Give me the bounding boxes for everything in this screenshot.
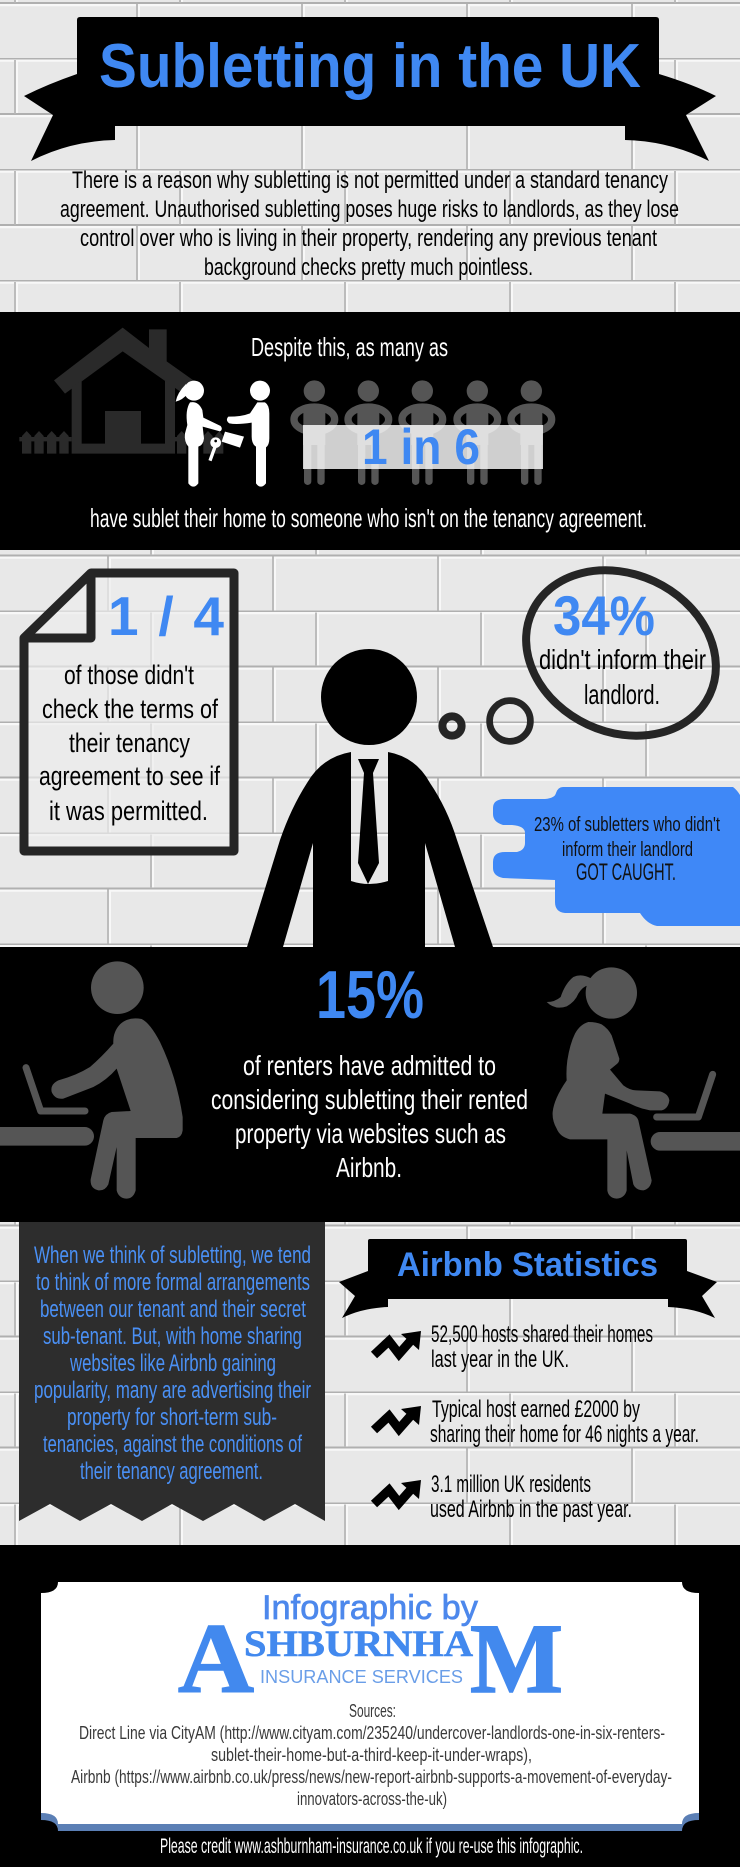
panel: document 1 in 4: 1 / 4 (108, 585, 224, 647)
banner: Airbnb Statistics (339, 1239, 717, 1318)
text: renters considering: of renters have admitted to (243, 1050, 496, 1081)
panel: home sharing text (19, 1222, 325, 1521)
title banner (24, 17, 716, 161)
stat: earnings (374, 1396, 699, 1448)
text: renters considering: considering subletting their rented (211, 1084, 528, 1115)
icon: woman handing keys to man (176, 381, 270, 487)
panel: document 1 in 4: their tenancy (69, 728, 190, 758)
sources: Sources: (349, 1701, 396, 1721)
stat: 34 percent: 34% (553, 584, 655, 647)
logo: Ashburnham Insurance Services: A (178, 1603, 254, 1714)
panel: home sharing text: property for short-term sub- (67, 1404, 277, 1431)
logo: Ashburnham Insurance Services: INSURANCE SERVICES (260, 1666, 463, 1687)
logo: Ashburnham Insurance Services: SHBURNHA (244, 1624, 473, 1665)
panel: home sharing text: When we think of subletting, we tend (34, 1242, 311, 1269)
stat: residents: used Airbnb in the past year. (430, 1496, 632, 1523)
panel: document 1 in 4: of those didn't (64, 660, 194, 690)
panel: home sharing text: sub-tenant. But, with home sharing (43, 1323, 302, 1350)
panel: document 1 in 4: it was permitted. (49, 796, 208, 826)
callout: got caught (493, 787, 740, 926)
stat: earnings: Typical host earned £2000 by (432, 1396, 640, 1423)
panel: document 1 in 4: check the terms of (42, 694, 218, 724)
intro text (60, 167, 679, 281)
panel: home sharing text: tenancies, against the conditions of (43, 1431, 302, 1458)
sources: sublet-their-home-but-a-third-keep-it-under-wraps), (211, 1745, 532, 1765)
logo: Ashburnham Insurance Services (178, 1603, 563, 1714)
panel: home sharing text: websites like Airbnb gaining (69, 1350, 276, 1377)
text: despite this: Despite this, as many as (251, 332, 448, 362)
callout: got caught: GOT CAUGHT. (576, 859, 676, 886)
panel: home sharing text: between our tenant and their secret (40, 1296, 306, 1323)
stat: 15 percent: 15% (316, 957, 424, 1033)
stat: 34 percent: landlord. (584, 679, 660, 710)
icon: man at laptop (0, 961, 183, 1199)
text: renters considering: Airbnb. (336, 1152, 402, 1183)
sources (71, 1701, 672, 1809)
icon: house with fence (19, 328, 223, 454)
stat: 1 in 6: 1 in 6 (362, 419, 480, 475)
logo: Ashburnham Insurance Services: M (470, 1603, 563, 1714)
panel: home sharing text: popularity, many are advertising their (34, 1377, 311, 1404)
sources: innovators-across-the-uk) (297, 1789, 447, 1809)
text: renters considering (211, 1050, 528, 1183)
icon: businessman (247, 649, 493, 947)
panel: document 1 in 4: agreement to see if (39, 761, 220, 791)
stat: 34 percent (539, 584, 706, 710)
panel: credit card (41, 1582, 699, 1831)
callout: got caught: inform their landlord (562, 839, 693, 861)
thought bubbles (442, 540, 740, 766)
icon: woman at laptop (547, 967, 740, 1199)
title: Subletting in the UK (99, 32, 641, 101)
panel: document 1 in 4 (24, 573, 234, 851)
intro text: background checks pretty much pointless. (204, 254, 533, 281)
stat: hosts: last year in the UK. (431, 1346, 569, 1373)
panel: home sharing text: to think of more formal arrangements (36, 1269, 310, 1296)
icon: five grey people (294, 380, 552, 485)
stat: residents (374, 1471, 632, 1523)
heading: infographic by: Infographic by (262, 1589, 478, 1627)
text: renters considering: property via websites such as (235, 1118, 506, 1149)
banner: Airbnb Statistics: Airbnb Statistics (397, 1246, 658, 1284)
stat: hosts (374, 1321, 653, 1373)
stat: residents: 3.1 million UK residents (431, 1471, 591, 1498)
stat: 1 in 6 (303, 419, 543, 475)
panel: home sharing text: their tenancy agreement. (80, 1458, 263, 1485)
